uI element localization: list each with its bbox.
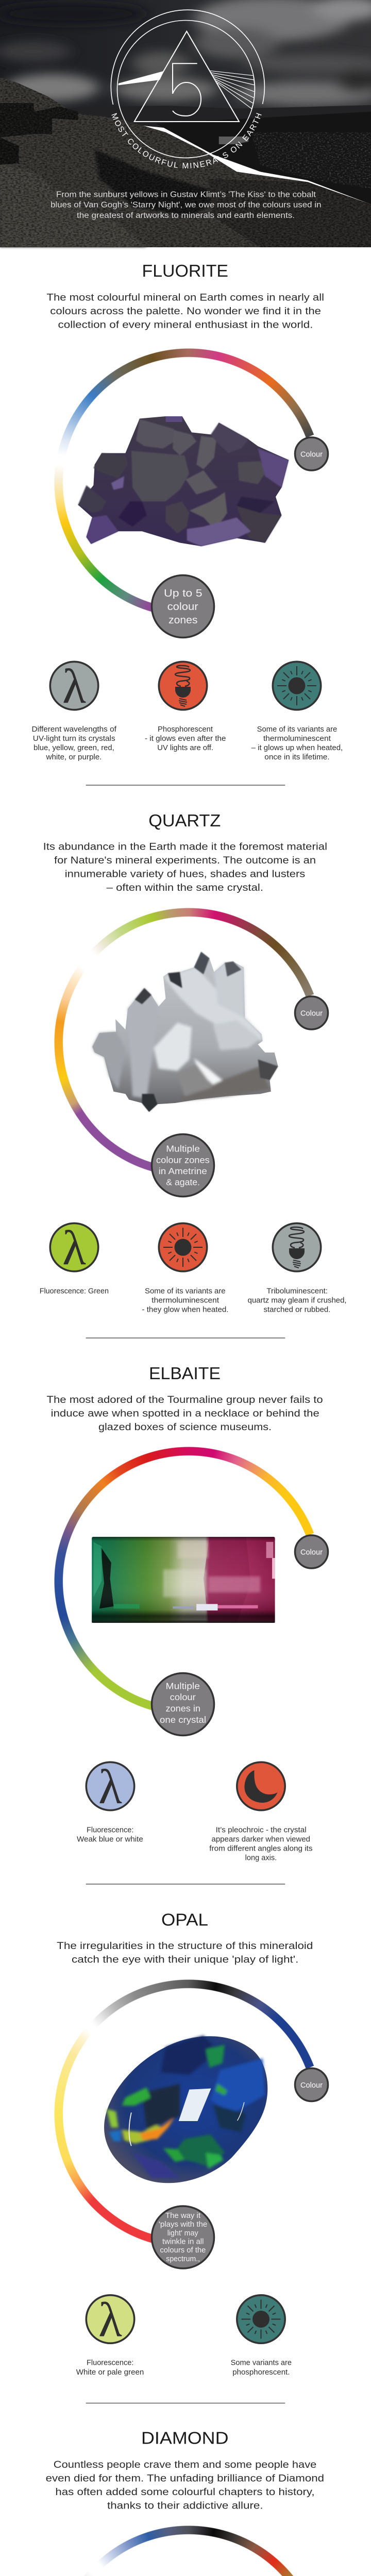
caption: fluorescence pale green: White or pale green <box>76 2368 144 2377</box>
description: opal: catch the eye with their unique 'play of light'. <box>72 1954 298 1965</box>
badge: colour zones, quartz: in Ametrine <box>159 1166 207 1176</box>
badge: colour, elbaite <box>295 1535 328 1568</box>
description: quartz: innumerable variety of hues, shades and lusters <box>65 868 306 879</box>
description: quartz: for Nature's mineral experiments. The outcome is an <box>54 855 316 866</box>
caption: thermoluminescent <box>142 1287 229 1314</box>
description: elbaite: The most adored of the Tourmaline group never fails to <box>46 1394 323 1405</box>
icon: fluorescence lambda: λ <box>62 659 86 714</box>
badge: colour zones, elbaite: zones in <box>166 1703 200 1714</box>
mineral photo: fluorite cluster <box>78 416 289 546</box>
mineral photo: black opal <box>104 2036 267 2183</box>
badge: colour zones, elbaite: Multiple <box>166 1681 200 1691</box>
icon: fluorescence lambda: λ <box>98 2293 122 2347</box>
badge: colour, opal <box>295 2068 328 2101</box>
badge: colour, quartz <box>295 996 328 1029</box>
badge: play of light, opal: The way it <box>165 2212 200 2220</box>
caption: phosphorescent variants: phosphorescent. <box>232 2368 290 2377</box>
description: fluorite: The most colourful mineral on Earth comes in nearly all <box>46 292 324 303</box>
caption: phosphorescent variants <box>231 2359 292 2377</box>
caption: pleochroic: long axis. <box>245 1854 277 1862</box>
intro text: the greatest of artworks to minerals and earth elements. <box>77 211 295 220</box>
caption: thermoluminescent <box>251 725 343 761</box>
colour ring: opal <box>54 1979 323 2248</box>
caption: phosphorescent: Phosphorescent <box>158 725 213 734</box>
icon: triboluminescent bulb <box>273 1223 321 1272</box>
caption: wavelengths: white, or purple. <box>45 753 102 761</box>
caption: triboluminescent: Triboluminescent: <box>266 1287 328 1295</box>
icon: pleochroic moon <box>237 1762 285 1810</box>
badge: colour, opal: Colour <box>300 2081 323 2090</box>
description: fluorite <box>46 292 324 331</box>
description: quartz: Its abundance in the Earth made it the foremost material <box>43 841 327 852</box>
badge: colour zones, quartz: & agate. <box>166 1177 200 1188</box>
caption: thermoluminescent: thermoluminescent <box>263 735 331 743</box>
caption: fluorescence weak blue: Fluorescence: <box>87 1826 133 1835</box>
badge: play of light, opal: light' may <box>167 2229 198 2238</box>
caption: fluorescence pale green: Fluorescence: <box>87 2359 133 2367</box>
description: opal <box>57 1940 313 1965</box>
heading: diamond: DIAMOND <box>141 2429 229 2448</box>
badge: play of light, opal: 'plays with the <box>159 2221 207 2229</box>
heading: quartz: QUARTZ <box>148 811 221 830</box>
icon: fluorescence lambda <box>86 2293 134 2347</box>
caption: wavelengths: Different wavelengths of <box>32 725 117 734</box>
caption: thermoluminescent: – it glows up when heated, <box>251 744 343 752</box>
description: diamond: thanks to their addictive allure. <box>107 2500 263 2511</box>
logo: prism in circle with title: MOST COLOURFUL MINERALS ON EARTH <box>111 113 262 168</box>
description: fluorite: collection of every mineral enthusiast in the world. <box>58 319 313 331</box>
badge: colour, fluorite: Colour <box>300 450 323 459</box>
caption: fluorescence weak blue <box>77 1826 143 1843</box>
description: opal: The irregularities in the structure of this mineraloid <box>57 1940 313 1952</box>
badge: colour zones, fluorite: zones <box>168 615 197 626</box>
badge: play of light, opal: twinkle in all <box>162 2238 204 2246</box>
header photo: mining landscape <box>0 0 371 247</box>
icon: fluorescence lambda <box>50 1221 98 1275</box>
logo: prism in circle with title <box>110 9 265 168</box>
caption: fluorescence green: Fluorescence: Green <box>40 1287 109 1295</box>
mineral photo: watermelon tourmaline <box>92 1537 275 1623</box>
caption: pleochroic <box>209 1826 312 1862</box>
colour ring: quartz <box>54 908 323 1177</box>
badge: colour, fluorite <box>295 437 328 470</box>
caption: triboluminescent <box>248 1287 347 1314</box>
colour ring: fluorite <box>54 348 323 617</box>
icon: fluorescence lambda: λ <box>98 1759 122 1814</box>
description: diamond <box>46 2459 324 2511</box>
description: quartz: – often within the same crystal. <box>107 882 263 893</box>
caption: phosphorescent variants: Some variants are <box>231 2359 292 2367</box>
badge: colour zones, elbaite: one crystal <box>160 1715 206 1725</box>
icon: thermoluminescent sun <box>159 1223 207 1272</box>
badge: colour zones, elbaite: colour <box>170 1692 196 1702</box>
icon: fluorescence lambda: λ <box>62 1221 86 1275</box>
badge: colour zones, quartz: colour zones <box>156 1155 210 1165</box>
description: quartz <box>43 841 327 893</box>
badge: colour zones, fluorite: Up to 5 <box>164 588 203 599</box>
badge: colour zones, fluorite <box>151 575 214 638</box>
caption: thermoluminescent: thermoluminescent <box>151 1296 219 1304</box>
heading: elbaite: ELBAITE <box>149 1364 221 1383</box>
caption: fluorescence weak blue: Weak blue or white <box>77 1835 143 1843</box>
caption: pleochroic: from different angles along its <box>209 1845 312 1853</box>
badge: colour zones, elbaite <box>151 1673 214 1735</box>
description: elbaite <box>46 1394 323 1433</box>
caption: wavelengths: blue, yellow, green, red, <box>33 744 114 752</box>
colour ring: elbaite <box>54 1447 323 1716</box>
caption: wavelengths <box>32 725 117 761</box>
badge: colour zones, quartz <box>151 1134 214 1196</box>
caption: thermoluminescent: - they glow when heated. <box>142 1306 229 1314</box>
intro text <box>50 191 322 220</box>
icon: fluorescence lambda <box>50 659 98 714</box>
badge: colour, elbaite: Colour <box>300 1549 323 1557</box>
icon: phosphorescent bulb <box>159 662 207 710</box>
badge: colour, quartz: Colour <box>300 1010 323 1018</box>
caption: fluorescence pale green <box>76 2359 144 2377</box>
description: diamond: Countless people crave them and some people have <box>54 2459 316 2470</box>
icon: fluorescence lambda <box>86 1759 134 1814</box>
badge: play of light, opal: colours of the <box>160 2246 206 2255</box>
intro text: From the sunburst yellows in Gustav Klimt’s 'The Kiss' to the cobalt <box>56 191 316 199</box>
icon: phosphorescent sun <box>237 2295 285 2343</box>
badge: colour zones, quartz: Multiple <box>166 1144 200 1154</box>
description: elbaite: induce awe when spotted in a necklace or behind the <box>51 1408 319 1419</box>
description: diamond: even died for them. The unfading brilliance of Diamond <box>46 2472 324 2484</box>
badge: play of light, opal: spectrum., <box>166 2255 200 2263</box>
badge: play of light, opal <box>151 2206 214 2268</box>
caption: pleochroic: It’s pleochroic - the crystal <box>216 1826 307 1835</box>
description: diamond: has often added some colourful chapters to history, <box>55 2486 315 2498</box>
intro text: blues of Van Gogh’s 'Starry Night', we owe most of the colours used in <box>50 201 322 209</box>
caption: triboluminescent: starched or rubbed. <box>264 1306 330 1314</box>
colour ring: diamond <box>85 2526 294 2576</box>
caption: triboluminescent: quartz may gleam if crushed, <box>248 1296 347 1304</box>
caption: phosphorescent: - it glows even after the <box>145 735 226 743</box>
badge: colour zones, fluorite: colour <box>167 601 198 613</box>
caption: thermoluminescent: Some of its variants are <box>145 1287 226 1295</box>
caption: phosphorescent <box>145 725 226 752</box>
caption: wavelengths: UV-light turn its crystals <box>33 735 115 743</box>
caption: thermoluminescent: Some of its variants are <box>257 725 337 734</box>
heading: fluorite: FLUORITE <box>142 261 228 280</box>
caption: phosphorescent: UV lights are off. <box>157 744 213 752</box>
caption: thermoluminescent: once in its lifetime. <box>264 753 330 761</box>
heading: opal: OPAL <box>161 1910 208 1929</box>
icon: thermoluminescent sun <box>273 662 321 710</box>
caption: pleochroic: appears darker when viewed <box>211 1835 310 1843</box>
description: fluorite: colours across the palette. No wonder we find it in the <box>50 306 321 317</box>
mineral photo: quartz cluster <box>92 952 278 1112</box>
description: elbaite: glazed boxes of science museums. <box>98 1421 272 1433</box>
